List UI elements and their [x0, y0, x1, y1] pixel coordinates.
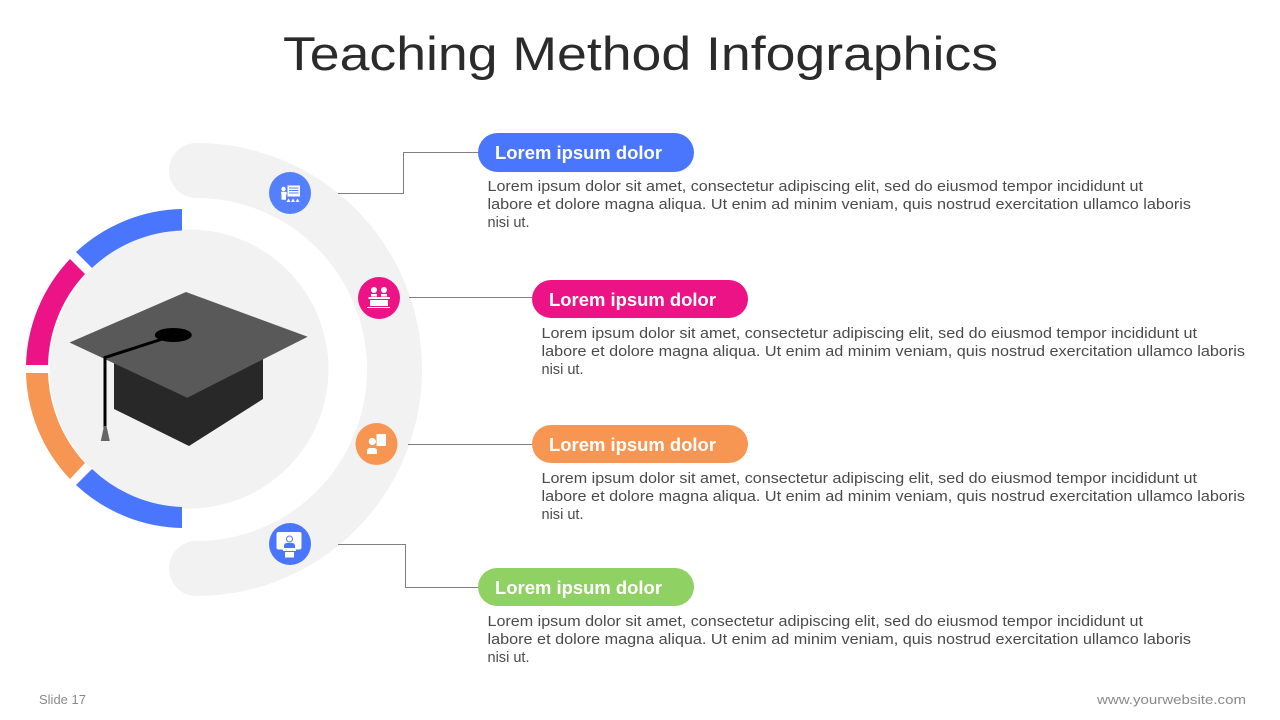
connector 1 — [338, 152, 478, 194]
footer: website: www.yourwebsite.com — [1096, 693, 1246, 707]
pill heading 3: Lorem ipsum dolor — [549, 434, 716, 455]
item 1 — [478, 133, 1191, 231]
pill heading 1 — [478, 133, 694, 172]
hub background circle — [50, 230, 328, 508]
body text 2: Lorem ipsum dolor sit amet, consectetur adipiscing elit, sed do eiusmod tempor incididunt ut — [542, 325, 1198, 342]
icon: panel at desk — [358, 277, 400, 319]
body text 3: Lorem ipsum dolor sit amet, consectetur adipiscing elit, sed do eiusmod tempor incididunt ut — [542, 470, 1198, 487]
icon: lecturer at podium — [269, 523, 311, 565]
title: Teaching Method Infographics — [283, 28, 998, 81]
body text 1: labore et dolore magna aliqua. Ut enim ad minim veniam, quis nostrud exercitation ullamco laboris — [488, 196, 1191, 213]
footer: slide number: Slide 17 — [39, 693, 86, 707]
pill heading 1: Lorem ipsum dolor — [495, 142, 662, 163]
item 2 — [532, 280, 1245, 378]
body text 1: nisi ut. — [488, 214, 530, 231]
icon: graduation cap — [70, 292, 308, 446]
body text 4 — [488, 613, 1191, 666]
pill heading 4: Lorem ipsum dolor — [495, 577, 662, 598]
item 3 — [532, 425, 1245, 523]
icon: teacher at board — [269, 172, 311, 214]
item 4 — [478, 568, 1191, 666]
icon: speaker with speech bubble — [356, 423, 398, 465]
body text 1 — [488, 178, 1191, 231]
body text 2: labore et dolore magna aliqua. Ut enim ad minim veniam, quis nostrud exercitation ullamco laboris — [542, 343, 1245, 360]
body text 4: labore et dolore magna aliqua. Ut enim ad minim veniam, quis nostrud exercitation ullamco laboris — [488, 631, 1191, 648]
ring segment: blue top — [76, 209, 182, 268]
connector 4 — [338, 544, 478, 588]
pill heading 4 — [478, 568, 694, 606]
body text 4: Lorem ipsum dolor sit amet, consectetur adipiscing elit, sed do eiusmod tempor incididunt ut — [488, 613, 1144, 630]
ring segment: orange — [26, 373, 85, 479]
center hub — [26, 209, 328, 528]
body text 1: Lorem ipsum dolor sit amet, consectetur adipiscing elit, sed do eiusmod tempor incididunt ut — [488, 178, 1144, 195]
body text 2 — [542, 325, 1245, 378]
pill heading 3 — [532, 425, 748, 463]
body text 2: nisi ut. — [542, 361, 584, 378]
ring segment: pink — [26, 259, 85, 365]
body text 3: labore et dolore magna aliqua. Ut enim ad minim veniam, quis nostrud exercitation ullamco laboris — [542, 488, 1245, 505]
ring segment: blue bottom — [76, 469, 182, 528]
pill heading 2 — [532, 280, 748, 318]
connector 3 — [408, 444, 532, 446]
body text 3 — [542, 470, 1245, 523]
pill heading 2: Lorem ipsum dolor — [549, 289, 716, 310]
large outer arc — [196, 170, 394, 568]
connector 2 — [409, 296, 532, 298]
body text 3: nisi ut. — [542, 506, 584, 523]
body text 4: nisi ut. — [488, 649, 530, 666]
